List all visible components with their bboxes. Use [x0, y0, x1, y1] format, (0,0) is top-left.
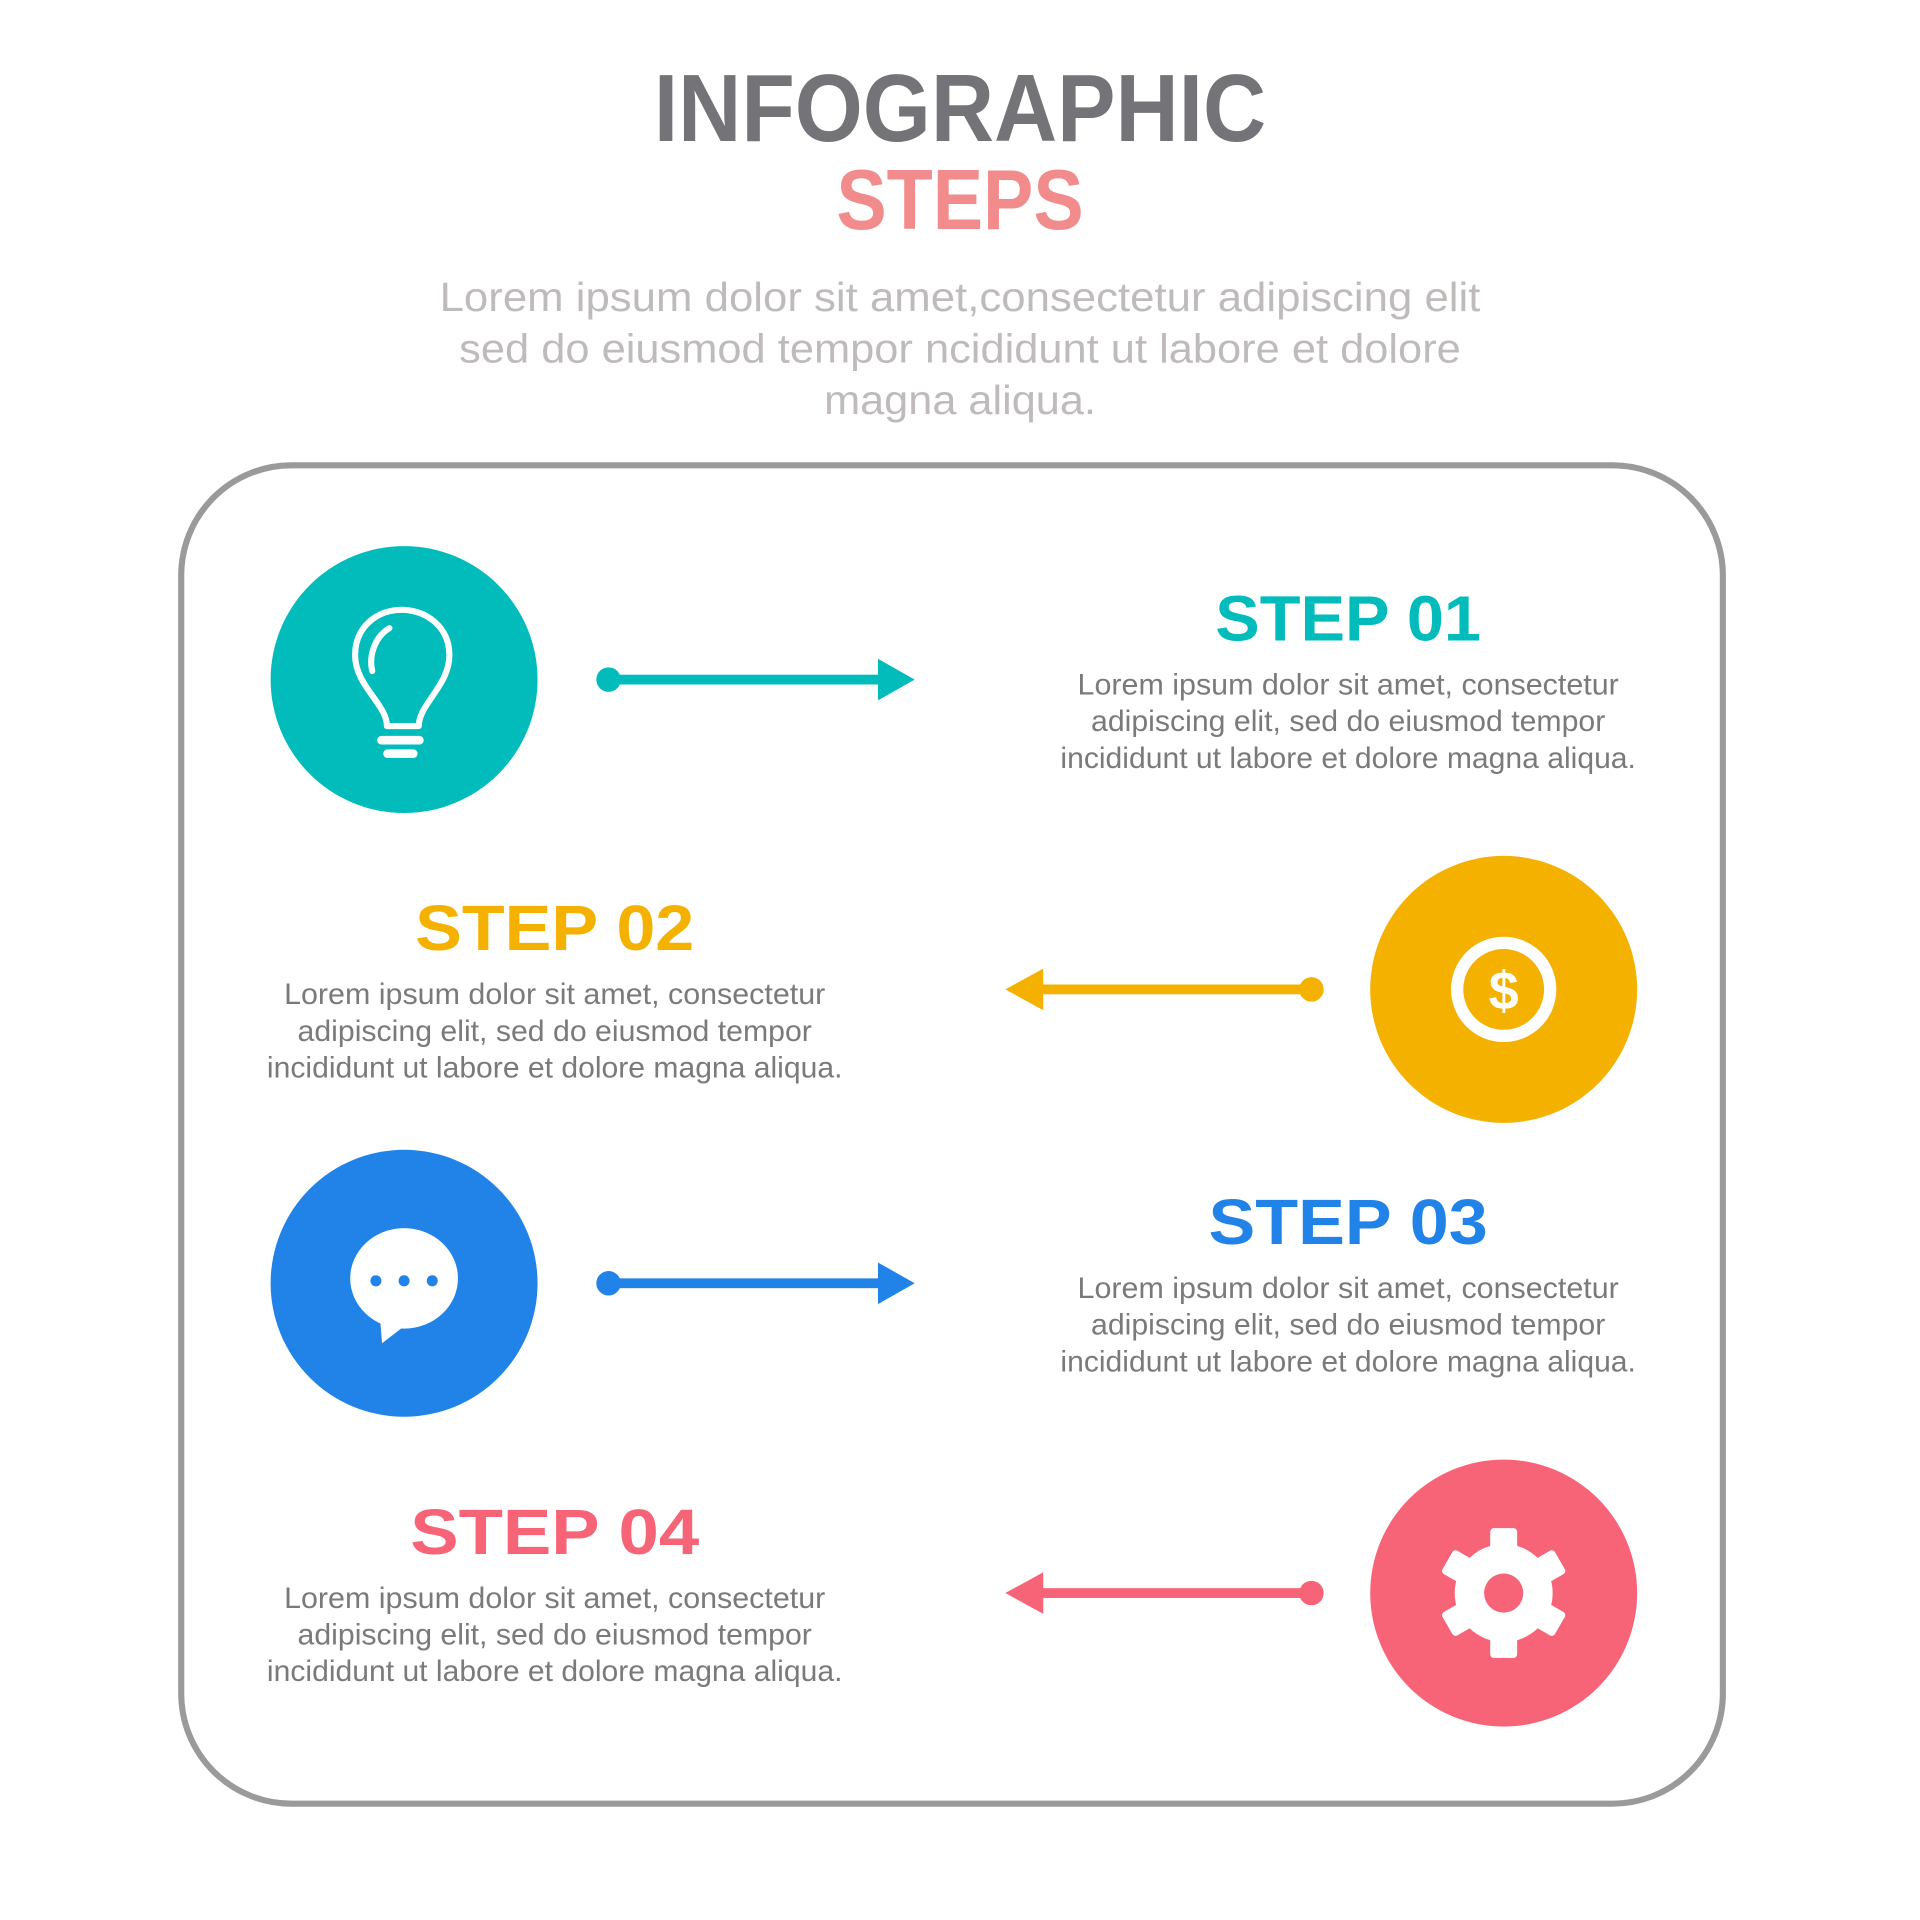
step 02 text: Lorem ipsum dolor sit amet, consectetur: [284, 978, 826, 1011]
step 01 icon: lightbulb: [271, 546, 538, 813]
arrow 03: [596, 1262, 915, 1304]
arrow 04: [1005, 1572, 1324, 1614]
step 03 text: incididunt ut labore et dolore magna aliqua.: [1060, 1345, 1636, 1378]
title: INFOGRAPHIC: [654, 56, 1266, 162]
step 04 text: Lorem ipsum dolor sit amet, consectetur: [284, 1582, 826, 1615]
step 02 text: STEP 02: [415, 893, 694, 964]
intro text: Lorem ipsum dolor sit amet,consectetur adipiscing elit: [440, 274, 1480, 320]
intro text: [440, 274, 1480, 423]
step 01 text: adipiscing elit, sed do eiusmod tempor: [1091, 705, 1606, 738]
step 04 text: [267, 1497, 842, 1688]
step 03 text: STEP 03: [1209, 1187, 1488, 1258]
panel frame: [181, 465, 1723, 1804]
step 04 icon: gear: [1370, 1460, 1637, 1727]
step 04 text: incididunt ut labore et dolore magna aliqua.: [267, 1655, 842, 1688]
step 02 icon: dollar coin: [1370, 856, 1637, 1123]
step 04 text: STEP 04: [410, 1497, 700, 1568]
step 03 icon: chat bubble: [271, 1150, 538, 1417]
step 04 text: adipiscing elit, sed do eiusmod tempor: [298, 1618, 812, 1651]
step 03 text: [1060, 1187, 1636, 1378]
step 03 text: adipiscing elit, sed do eiusmod tempor: [1091, 1309, 1606, 1342]
step 01 text: STEP 01: [1215, 583, 1481, 654]
step 02 text: [267, 893, 842, 1085]
step 01 text: incididunt ut labore et dolore magna aliqua.: [1060, 742, 1636, 775]
subtitle: STEPS: [836, 152, 1084, 248]
step 02 text: incididunt ut labore et dolore magna aliqua.: [267, 1052, 842, 1085]
step 02 icon: dollar coin: $: [1489, 961, 1519, 1021]
step 03 text: Lorem ipsum dolor sit amet, consectetur: [1078, 1272, 1619, 1305]
intro text: sed do eiusmod tempor ncididunt ut labore et dolore: [459, 325, 1461, 371]
arrow 02: [1005, 969, 1324, 1010]
arrow 01: [596, 659, 915, 700]
step 01 text: Lorem ipsum dolor sit amet, consectetur: [1078, 668, 1619, 701]
step 01 text: [1060, 583, 1636, 775]
step 02 text: adipiscing elit, sed do eiusmod tempor: [298, 1015, 812, 1048]
intro text: magna aliqua.: [824, 377, 1096, 423]
